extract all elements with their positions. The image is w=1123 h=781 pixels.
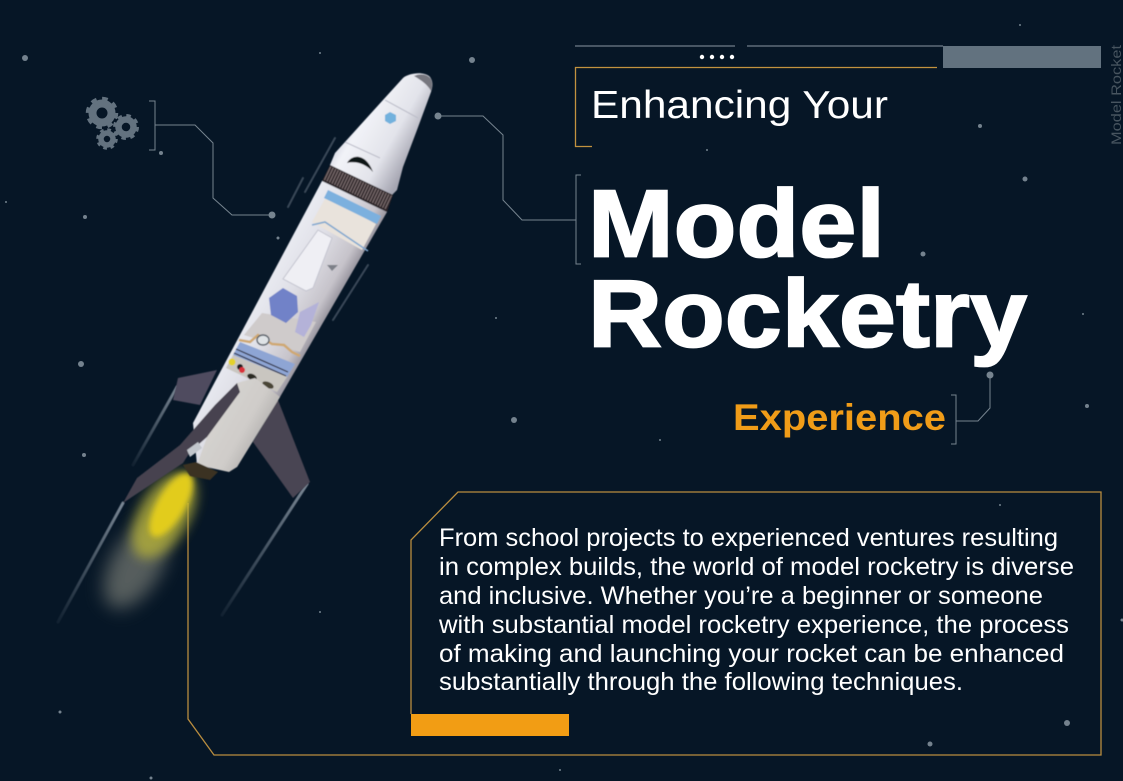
connector: title to subtitle	[951, 372, 994, 444]
heading: Enhancing Your: Enhancing Your	[591, 84, 888, 127]
rocket	[123, 73, 432, 503]
rocket: hazard band	[226, 355, 287, 392]
intro paragraph: in complex builds, the world of model rocketry is diverse	[439, 553, 1074, 581]
rocket: blue band	[233, 342, 295, 377]
rocket: round badge	[257, 335, 269, 345]
gear small	[98, 130, 116, 148]
heading: Model Rocketry	[588, 170, 1027, 368]
rocket: beige lower section	[244, 313, 316, 352]
intro paragraph: of making and launching your rocket can be enhanced	[439, 640, 1064, 668]
rocket: nose porthole	[385, 112, 396, 124]
rocket: lower tube	[197, 378, 280, 472]
gear right	[114, 116, 138, 138]
intro paragraph: with substantial model rocketry experience, the process	[438, 611, 1069, 639]
intro paragraph	[438, 524, 1074, 696]
orange accent bar	[411, 714, 569, 736]
rocket: nose seam lines	[345, 100, 418, 158]
rocket: main body	[193, 181, 387, 467]
rocket: tan wavy line	[239, 335, 300, 356]
gear large	[88, 98, 116, 128]
rocket: triangle mark	[327, 265, 338, 271]
frame: orange outline around intro text	[188, 492, 1101, 755]
intro paragraph: substantially through the following techniques.	[439, 668, 963, 696]
rocket: blue stripe	[324, 190, 381, 224]
intro paragraph: and inclusive. Whether you’re a beginner or someone	[439, 582, 1043, 610]
connector: rocket nose to title	[434, 112, 581, 264]
rocket: blue panel line	[312, 222, 368, 251]
subheading: Experience: Experience	[733, 397, 946, 438]
intro paragraph: From school projects to experienced ventures resulting	[439, 524, 1058, 552]
rocket: ribbed collar	[322, 165, 393, 212]
icon: gears	[88, 98, 138, 148]
rocket: blue hexagon pattern	[269, 288, 298, 323]
rocket: nose tip shading	[414, 74, 432, 91]
orange title bracket	[576, 68, 937, 146]
rocket: launch lug	[187, 442, 202, 457]
connector: gears to rocket	[149, 101, 276, 218]
heading: Model Rocketry: Model	[588, 170, 885, 278]
rocket: nose cone	[330, 73, 432, 196]
rocket: engine nozzle	[183, 462, 218, 480]
rocket: nose notch	[347, 157, 373, 172]
header rules and dots	[575, 46, 943, 59]
rocket: lilac panel	[295, 302, 319, 337]
rocket: right fin	[253, 400, 310, 498]
heading: Model Rocketry: Rocketry	[588, 260, 1027, 368]
rocket: white side panel	[283, 230, 332, 291]
rocket: left fin	[173, 370, 217, 405]
rocket: cream section	[312, 197, 376, 250]
rocket: black pinstripes	[234, 349, 288, 376]
speed streaks	[58, 138, 368, 622]
rocket exhaust flame	[90, 461, 210, 619]
grey header block	[943, 46, 1101, 68]
rocket: centre fin	[123, 383, 240, 503]
